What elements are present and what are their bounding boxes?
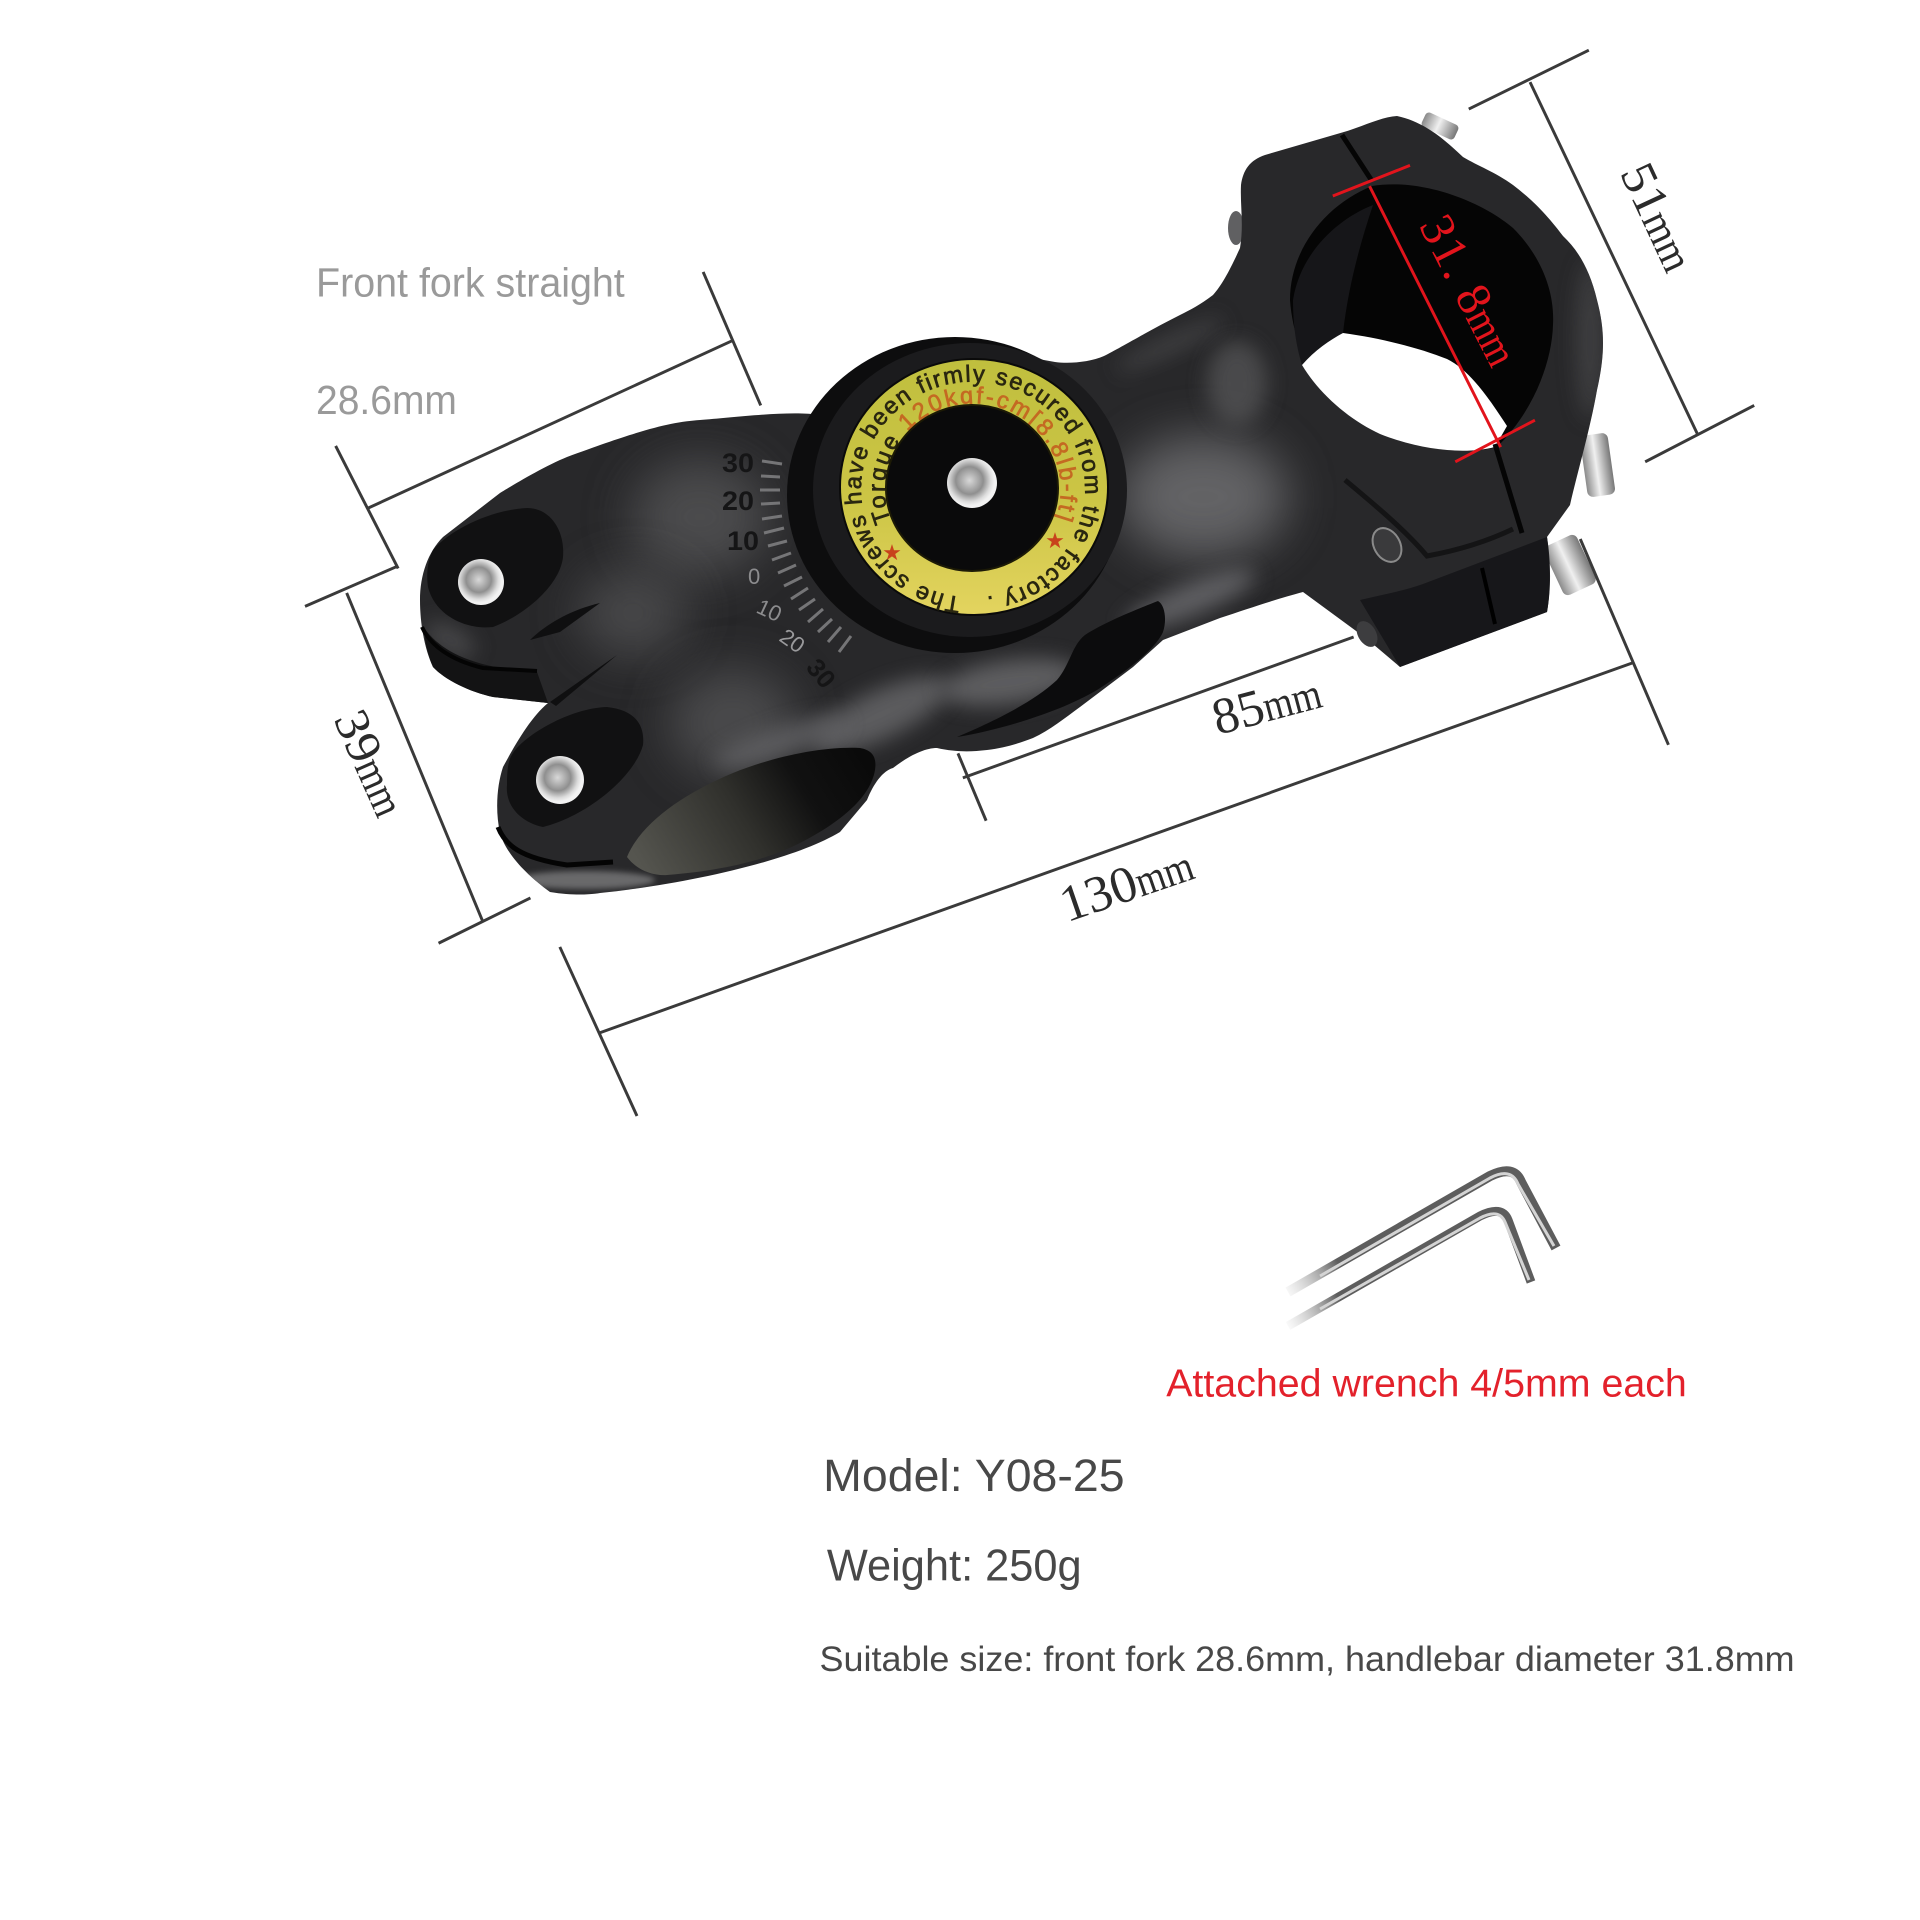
spec: weight: Weight: 250g xyxy=(827,1541,1082,1590)
icon: hex wrenches xyxy=(1288,1171,1556,1326)
label: front fork straight: Front fork straight xyxy=(316,259,625,305)
upper crease xyxy=(530,603,600,640)
rear lower bolt xyxy=(1542,533,1598,597)
dimension: 130mm xyxy=(560,539,1668,1116)
dimension: 39mm: 39 xyxy=(323,701,394,771)
rear side bolt xyxy=(1579,432,1616,498)
lower clamp slit xyxy=(498,827,613,865)
dimension: 39mm xyxy=(305,566,530,943)
dimension: 130mm: mm xyxy=(1128,841,1200,906)
inner torque text: Torque 120kgf-cm[8.8lb-ft] xyxy=(870,386,1078,526)
fork clamp bore xyxy=(627,748,875,875)
inner bore surface xyxy=(1293,205,1373,365)
lower block seam xyxy=(1482,568,1495,624)
upper lobe underside xyxy=(424,628,548,703)
outer label text: The screws have been firmly secured from the factory . xyxy=(844,364,1099,614)
view through clamp xyxy=(1302,333,1507,451)
dimension: 85mm: 85 xyxy=(1206,678,1270,747)
dimension: 130mm: 130 xyxy=(1052,854,1145,934)
lower small bolt xyxy=(1352,617,1382,651)
lower crease xyxy=(550,655,617,706)
infographic canvas xyxy=(304,48,1792,1676)
dimension: 28.6mm fork width xyxy=(336,272,761,568)
handlebar clamp bore xyxy=(1290,184,1553,451)
dimension: 31.8mm handlebar bore: mm xyxy=(1456,299,1527,374)
product: bicycle stem photo xyxy=(378,71,1656,935)
spec: suitable size: Suitable size: front fork 28.6mm, handlebar diameter 31.8mm xyxy=(820,1640,1795,1679)
angle scale markings: 30 xyxy=(722,448,754,478)
angle scale markings xyxy=(722,448,851,694)
under-neck slot xyxy=(957,601,1165,737)
small front bolt xyxy=(1367,523,1407,567)
left side bolt xyxy=(1228,211,1244,245)
rotating disc housing xyxy=(787,337,1123,653)
wrench: 5mm xyxy=(1288,1171,1556,1292)
angle scale markings: 20 xyxy=(722,486,754,516)
dimension: 31.8mm handlebar bore: 31. 8 xyxy=(1409,205,1504,322)
dimension: 51mm: mm xyxy=(1632,203,1702,279)
dimension and text layer xyxy=(305,50,1795,1679)
body surface highlights and shading xyxy=(419,260,1604,889)
label: 28.6mm: 28.6mm xyxy=(316,377,457,423)
clamp seam xyxy=(1342,135,1522,533)
upper bolt recess xyxy=(427,508,563,627)
angle scale markings: 10 xyxy=(753,594,786,627)
dimension: 85mm: mm xyxy=(1257,669,1327,731)
lower clamp block xyxy=(1360,537,1550,667)
lower bolt xyxy=(536,756,584,804)
stem body silhouette xyxy=(420,116,1603,895)
disc cap xyxy=(813,343,1127,637)
dimension: 51mm xyxy=(1469,50,1754,462)
dimension: 85mm xyxy=(958,637,1354,821)
dimension: 39mm: mm xyxy=(345,750,414,824)
dimension: 51mm: 51 xyxy=(1609,154,1681,224)
centre screw xyxy=(947,458,997,508)
label centre black disc xyxy=(886,405,1058,571)
rear top bolt xyxy=(1420,111,1460,141)
lower bolt recess xyxy=(507,707,643,827)
clamp shoulder edge xyxy=(1345,480,1513,556)
left clamp slit xyxy=(422,627,537,671)
wrench: 4mm xyxy=(1288,1211,1531,1326)
spec: model: Model: Y08-25 xyxy=(823,1450,1125,1501)
angle scale markings: 20 xyxy=(775,624,810,658)
angle scale markings: 30 xyxy=(800,653,842,694)
caption: attached wrench: Attached wrench 4/5mm each xyxy=(1166,1362,1687,1405)
upper bolt xyxy=(458,559,504,605)
angle scale markings: 0 xyxy=(748,564,760,589)
left star: ★ xyxy=(882,540,902,565)
dimension: 31.8mm handlebar bore xyxy=(1333,165,1535,462)
right star: ★ xyxy=(1045,528,1065,553)
torque label ring xyxy=(840,359,1108,615)
angle scale markings: 10 xyxy=(727,526,759,556)
